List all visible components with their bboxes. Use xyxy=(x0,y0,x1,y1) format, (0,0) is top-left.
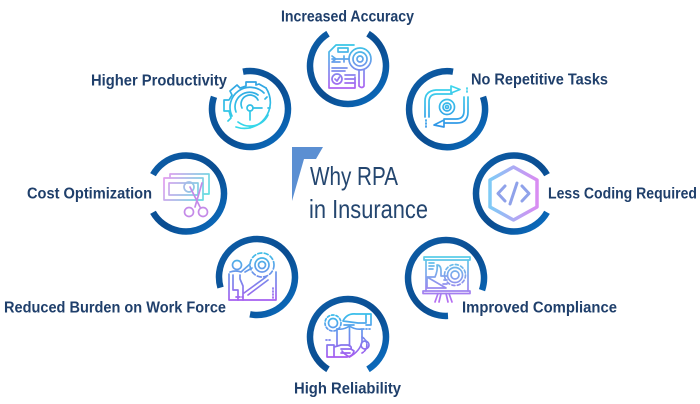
item: Less Coding Required xyxy=(476,155,697,232)
logo mark xyxy=(292,147,323,201)
item: Cost Optimization xyxy=(27,155,224,231)
ring: Increased Accuracy xyxy=(310,34,386,104)
item: No Repetitive Tasks xyxy=(409,71,608,147)
icon: repeat arrows xyxy=(425,86,468,127)
ring: Improved Compliance xyxy=(408,240,484,316)
item: Reduced Burden on Work Force xyxy=(4,239,295,316)
title text: Why RPA: Why RPA xyxy=(310,161,399,191)
ring: Reduced Burden on Work Force xyxy=(219,239,295,315)
item: High Reliability xyxy=(294,299,401,398)
title text: in Insurance: in Insurance xyxy=(309,194,428,224)
heading: Improved Compliance: Improved Compliance xyxy=(462,300,617,316)
icon: banknotes and scissors xyxy=(164,174,209,216)
icon: presentation board with thumb and gear xyxy=(423,257,470,302)
heading: Cost Optimization: Cost Optimization xyxy=(27,186,152,202)
heading: High Reliability: High Reliability xyxy=(294,380,401,398)
heading: Reduced Burden on Work Force: Reduced Burden on Work Force xyxy=(4,300,226,316)
center title xyxy=(292,147,428,224)
heading: Increased Accuracy: Increased Accuracy xyxy=(281,8,414,26)
ring: Cost Optimization xyxy=(153,155,224,231)
item: Higher Productivity xyxy=(91,71,288,147)
ring: Higher Productivity xyxy=(212,71,288,147)
heading: No Repetitive Tasks: No Repetitive Tasks xyxy=(471,72,608,88)
ring: No Repetitive Tasks xyxy=(409,71,485,147)
icon: gear with clock xyxy=(224,82,270,128)
item: Improved Compliance xyxy=(408,240,617,316)
ring: Less Coding Required xyxy=(476,155,547,232)
icon: shield with gears and hands xyxy=(325,314,371,357)
icon: document and magnifier xyxy=(329,45,371,88)
item: Increased Accuracy xyxy=(281,8,414,104)
icon: code hexagon xyxy=(490,167,537,220)
ring: High Reliability xyxy=(310,299,386,369)
icon: person pushing gear xyxy=(229,253,276,300)
heading: Higher Productivity: Higher Productivity xyxy=(91,72,227,90)
